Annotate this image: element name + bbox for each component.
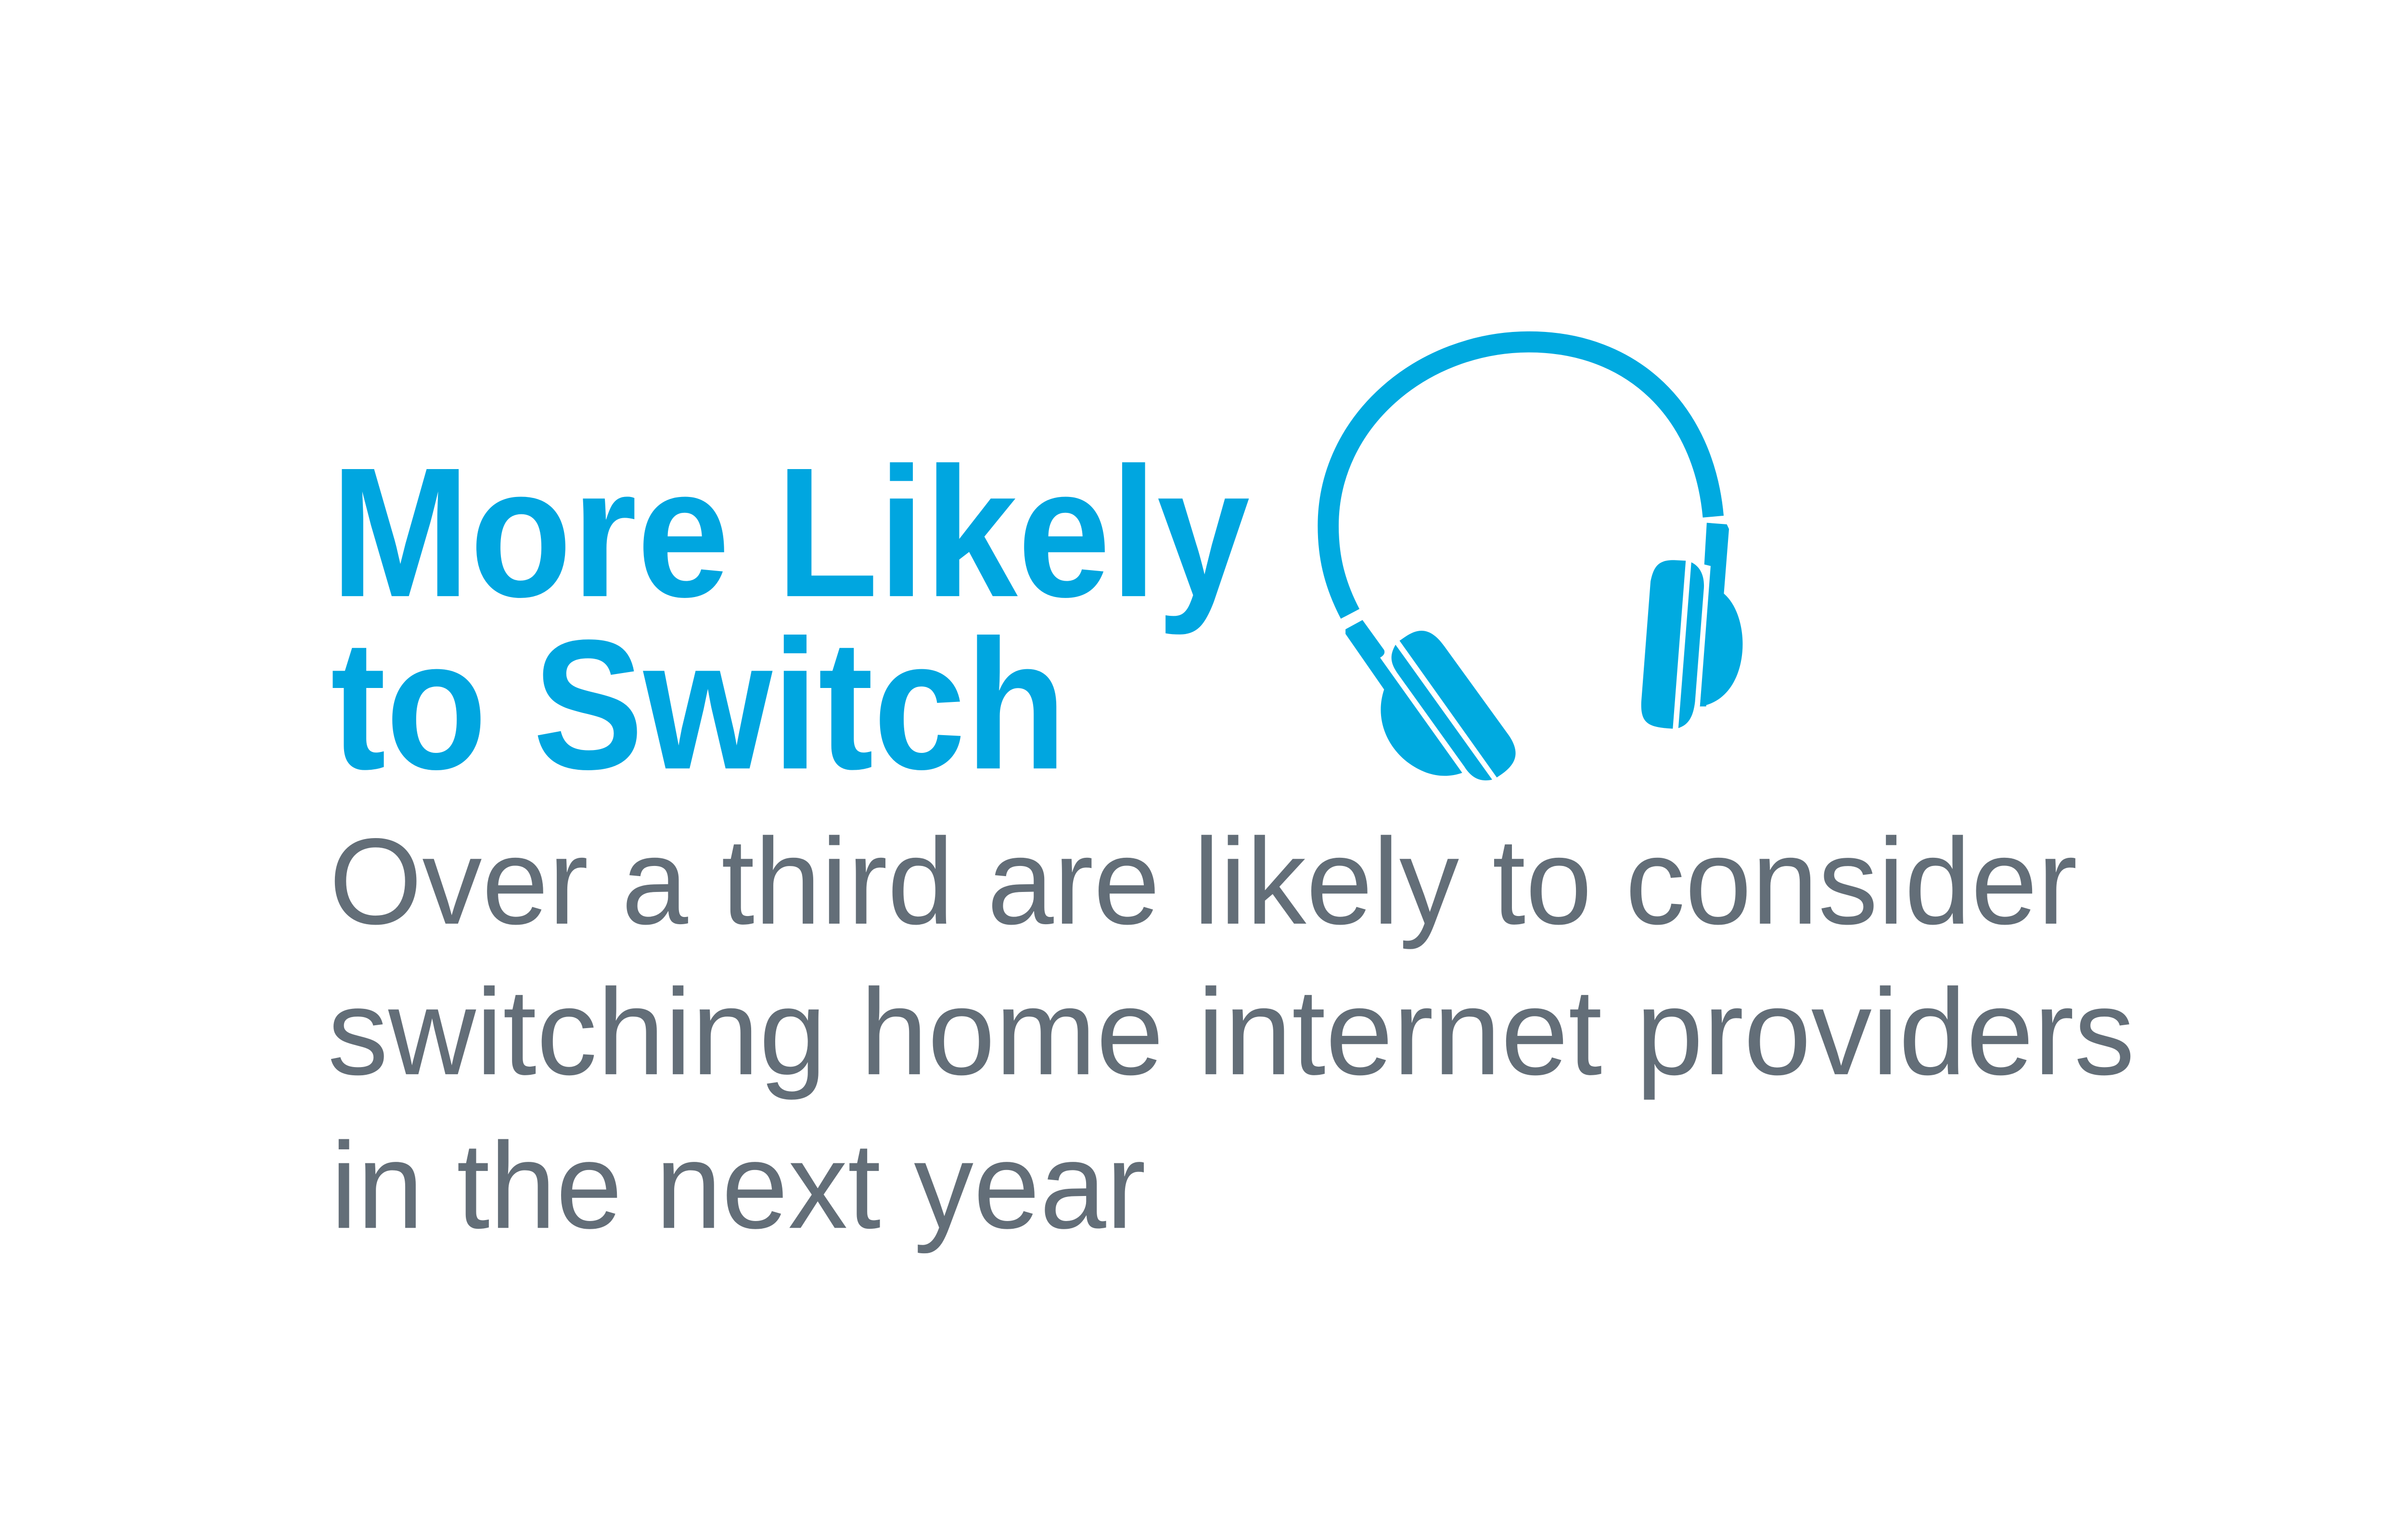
title: More Likely bbox=[331, 429, 1251, 636]
subtitle text: switching home internet providers bbox=[328, 964, 2135, 1101]
title bbox=[331, 429, 1251, 808]
subtitle text: in the next year bbox=[331, 1117, 1146, 1254]
icon: headphones bbox=[1328, 342, 1742, 780]
subtitle text bbox=[328, 813, 2135, 1254]
subtitle text: Over a third are likely to consider bbox=[329, 813, 2077, 950]
title: to Switch bbox=[331, 601, 1067, 808]
